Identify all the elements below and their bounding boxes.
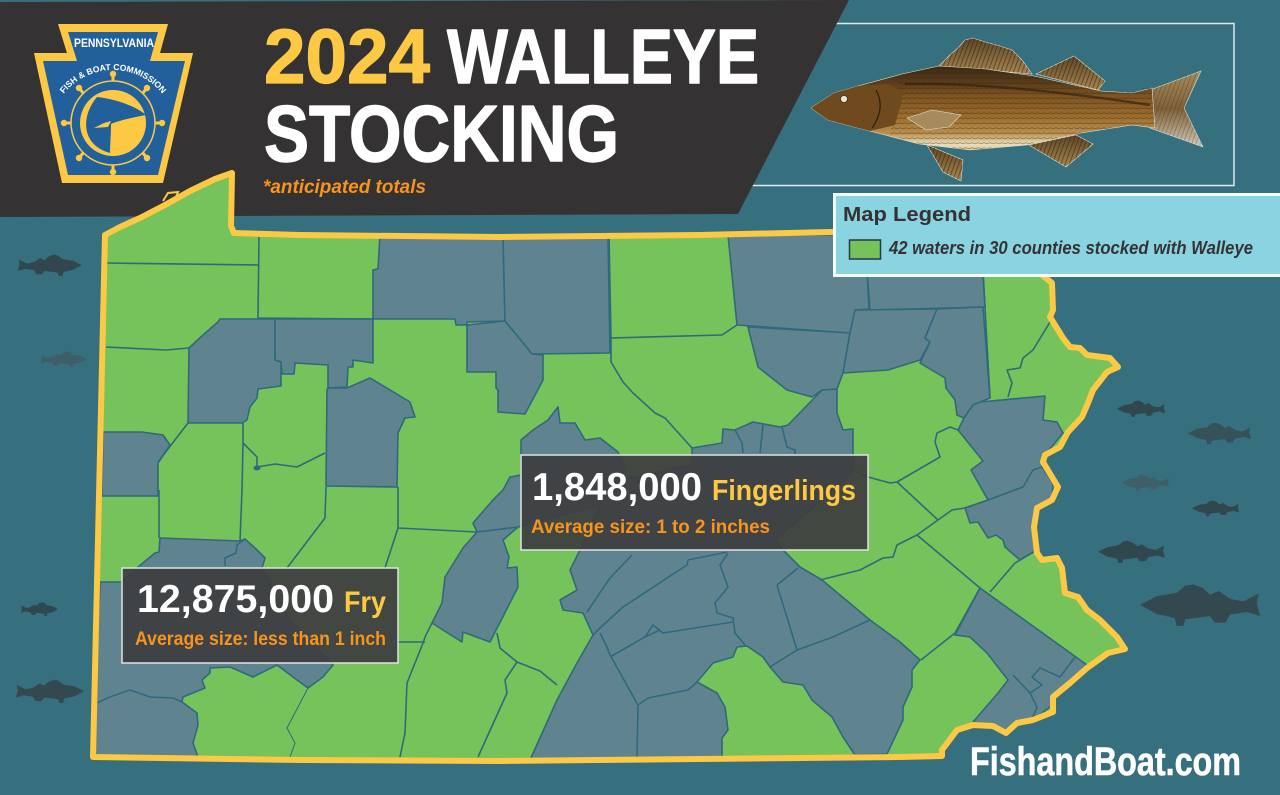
pelvic fin: [927, 145, 963, 181]
wheel handles: [64, 74, 162, 172]
logo text arc: FISH & BOAT COMMISSION: [60, 64, 166, 94]
fish silhouette: [1192, 500, 1239, 516]
state fill: [93, 173, 1125, 761]
fish silhouette: [41, 351, 87, 367]
title line two: STOCKING: [264, 89, 619, 178]
state outline: [93, 173, 1125, 761]
wheel hub: [80, 90, 146, 156]
title year: 2024: [264, 14, 430, 100]
anal fin: [1029, 135, 1093, 167]
fish silhouette: [1122, 475, 1169, 491]
keystone shield: [34, 24, 193, 183]
fry size: Average size: less than 1 inch: [135, 629, 386, 650]
second dorsal fin: [1036, 56, 1105, 90]
fish fin: [94, 121, 111, 128]
legend text: 42 waters in 30 counties stocked with Walleye: [888, 238, 1253, 258]
title line one white: WALLEYE: [447, 14, 759, 100]
fish silhouette: [16, 680, 84, 703]
dorsal fin: [939, 38, 1032, 74]
unstocked counties: [93, 235, 1087, 760]
legend swatch: [850, 240, 880, 259]
callout: fingerlings: [521, 455, 868, 550]
fish silhouette: [21, 602, 58, 616]
county borders: [97, 236, 1075, 757]
fish silhouette: [1188, 423, 1251, 444]
lateral stripe: [905, 84, 1150, 105]
ship wheel: [61, 71, 165, 175]
gill: [872, 90, 880, 128]
fry number: 12,875,000: [137, 578, 334, 621]
callout: fry: [122, 568, 398, 663]
wheel knobs: [61, 71, 165, 175]
eye: [840, 96, 848, 102]
callout box: [122, 568, 398, 663]
background fish silhouettes: [16, 255, 1260, 703]
fish silhouette: [1140, 584, 1260, 626]
keystone logo: [34, 24, 193, 183]
fry label: Fry: [344, 586, 386, 619]
fish silhouette: [1098, 541, 1165, 563]
fish illustration frame: [740, 24, 1234, 186]
title: [264, 14, 759, 178]
fingerlings size: Average size: 1 to 2 inches: [531, 517, 770, 538]
map of Pennsylvania counties: [93, 173, 1125, 761]
fish silhouette: [18, 255, 82, 276]
keystone inner: [43, 32, 185, 175]
legend box: [834, 194, 1280, 276]
fish silhouette: [1117, 401, 1165, 417]
lake: [254, 466, 260, 470]
map legend: [834, 194, 1280, 276]
tail: [1150, 71, 1203, 147]
logo text top: PENNSYLVANIA: [74, 36, 154, 50]
leaping fish: [86, 97, 146, 153]
legend title: Map Legend: [843, 204, 971, 226]
callout box: [521, 455, 868, 550]
subtitle: *anticipated totals: [263, 177, 426, 198]
fingerlings number: 1,848,000: [532, 466, 702, 509]
fingerlings label: Fingerlings: [712, 475, 856, 507]
wheel rings: [71, 81, 155, 165]
header band: [0, 0, 849, 217]
Presque Isle: [163, 192, 178, 203]
body: [811, 66, 1155, 150]
pectoral fin: [907, 110, 961, 130]
walleye illustration: [811, 38, 1203, 181]
head: [811, 84, 904, 131]
